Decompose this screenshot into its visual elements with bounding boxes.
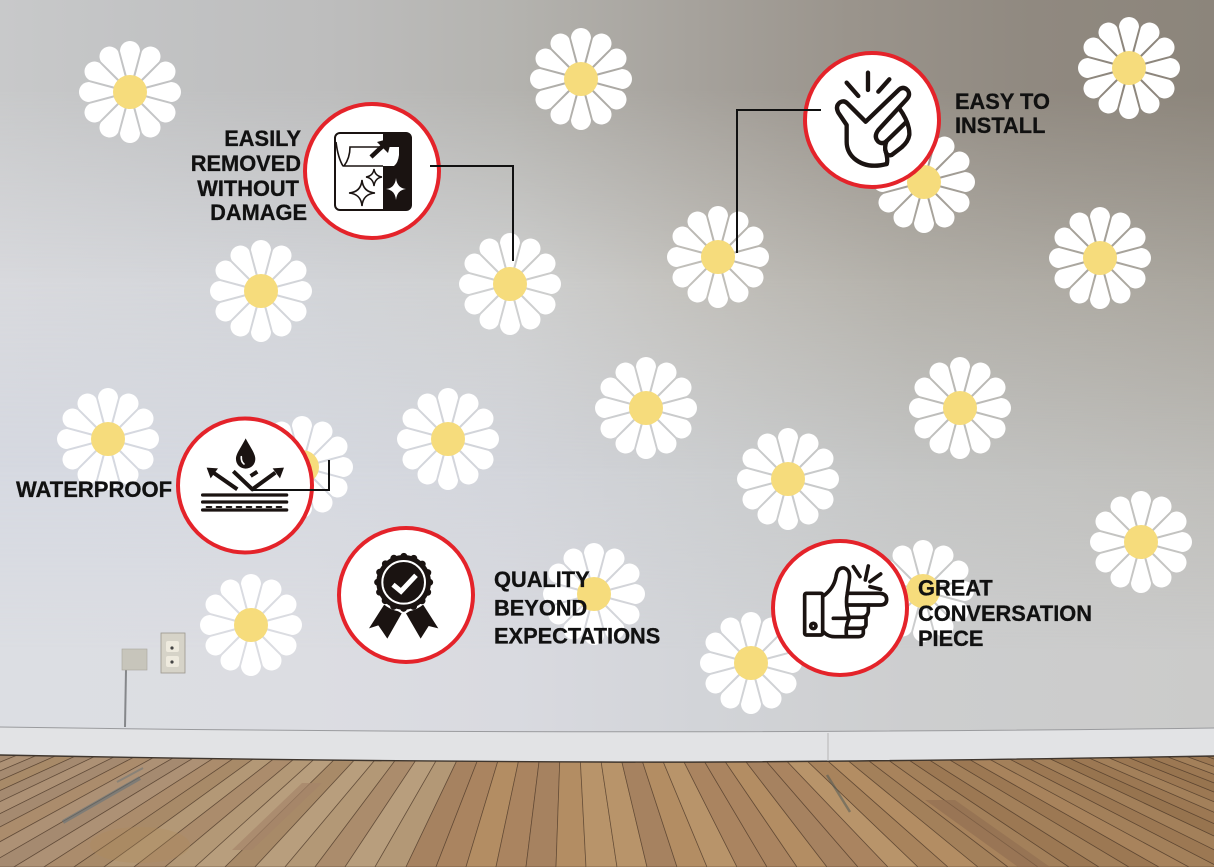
label: GREAT — [918, 576, 993, 600]
baseboard — [0, 727, 1214, 762]
label: QUALITY — [494, 567, 590, 592]
label — [955, 89, 1050, 138]
callout: waterproof — [16, 418, 329, 552]
leader line — [252, 460, 329, 490]
leader line — [737, 110, 821, 253]
label: EASY TO — [955, 89, 1050, 114]
icon: finger heart hand — [837, 73, 909, 166]
daisy decals — [57, 17, 1192, 714]
icon: thumb and finger hand — [805, 566, 887, 637]
callout: great conversation piece — [773, 541, 1092, 675]
label: WATERPROOF — [16, 477, 172, 502]
label: EXPECTATIONS — [494, 624, 660, 648]
label — [918, 576, 1092, 651]
label — [494, 567, 660, 648]
callout: easily removed without damage — [191, 104, 513, 261]
leader line — [430, 166, 513, 261]
label: REMOVED — [191, 151, 301, 176]
badge circle — [773, 541, 907, 675]
icon: peeling sheet with sparkles — [335, 133, 411, 210]
icon: rosette award with check — [369, 550, 438, 639]
label: CONVERSATION — [918, 601, 1092, 626]
label: WITHOUT — [197, 176, 300, 201]
icon: water drop repelled from layered surface — [203, 438, 287, 510]
label: EASILY — [224, 126, 301, 151]
badge circle — [178, 418, 312, 552]
callout: quality beyond expectations — [339, 528, 660, 662]
label: DAMAGE — [210, 200, 307, 225]
label — [191, 126, 307, 225]
wall outlet and switch with cable — [122, 633, 185, 727]
label: PIECE — [918, 626, 983, 651]
badge circle — [805, 53, 939, 187]
callout: easy to install — [737, 53, 1050, 253]
label: BEYOND — [494, 596, 587, 620]
label: INSTALL — [955, 113, 1045, 138]
badge circle — [305, 104, 439, 238]
wood floor — [0, 750, 1214, 867]
badge circle — [339, 528, 473, 662]
